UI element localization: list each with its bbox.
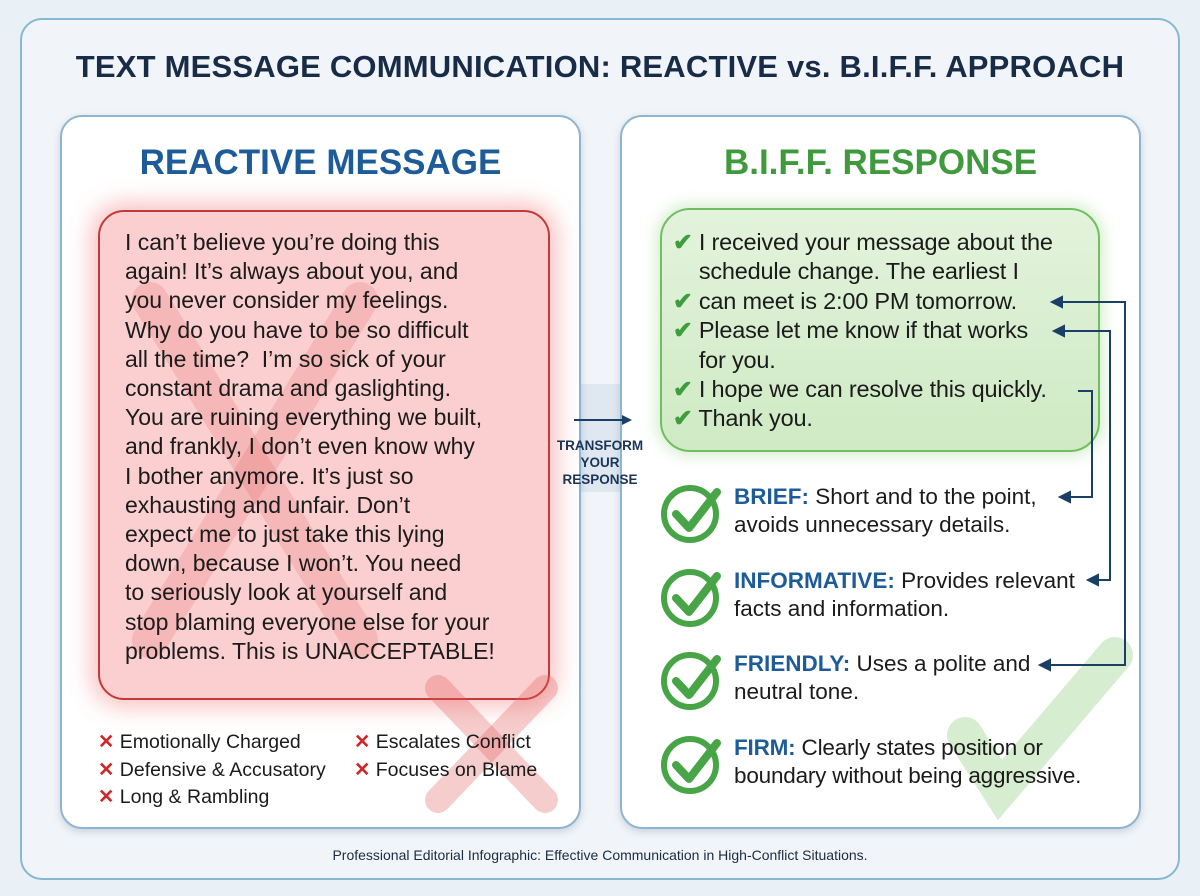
list: reactive traits: ✕ Emotionally Charged [98,731,301,753]
label: transform your response: RESPONSE [562,472,638,487]
biff message text: ✔ I hope we can resolve this quickly. [673,376,1047,402]
reactive message text: problems. This is UNACCEPTABLE! [125,638,495,664]
label: transform your response: TRANSFORM [557,438,643,453]
panel: biff [620,115,1141,829]
list: reactive traits: ✕ Escalates Conflict [354,731,531,753]
footer caption: Professional Editorial Infographic: Effective Communication in High-Conflict Situations. [332,847,868,863]
item: firm [661,735,1081,794]
reactive message text: constant drama and gaslighting. [125,375,451,401]
item: firm: FIRM: Clearly states position or [734,735,1043,760]
reactive message text: expect me to just take this lying [125,521,445,547]
reactive message text: I bother anymore. It’s just so [125,463,414,489]
list: reactive traits: ✕ Focuses on Blame [354,758,537,780]
reactive message text: to seriously look at yourself and [125,579,447,605]
reactive message text: stop blaming everyone else for your [125,609,489,635]
reactive message text: exhausting and unfair. Don’t [125,492,410,518]
item: informative: INFORMATIVE: Provides relevant [734,568,1075,593]
red speech bubble [98,210,550,700]
biff message text: ✔ Thank you. [673,405,813,431]
green bubble [660,208,1100,452]
reactive message text: I can’t believe you’re doing this [125,229,440,255]
reactive message text: and frankly, I don’t even know why [125,433,475,459]
item: friendly [661,651,1030,710]
label: transform your response: YOUR [580,455,620,470]
biff message text: ✔ Please let me know if that works [673,317,1028,343]
list: reactive traits [98,731,537,808]
reactive message text: again! It’s always about you, and [125,258,458,284]
panel: reactive [60,115,581,829]
heading: reactive message: REACTIVE MESSAGE [140,143,501,182]
heading: biff response: B.I.F.F. RESPONSE [724,143,1037,182]
biff message text: ✔ can meet is 2:00 PM tomorrow. [673,288,1017,314]
item: firm: boundary without being aggressive. [734,762,1081,788]
reactive message text: all the time? I’m so sick of your [125,346,446,372]
biff message text: ✔ I received your message about the [673,229,1053,255]
title: TEXT MESSAGE COMMUNICATION: REACTIVE vs. B.I.F.F. APPROACH [76,49,1124,84]
arrow: transform [574,415,632,425]
item: brief: avoids unnecessary details. [734,512,1010,536]
reactive message text: You are ruining everything we built, [125,404,482,430]
list: reactive traits: ✕ Long & Rambling [98,786,269,808]
reactive message text [125,229,495,664]
biff criteria list [661,484,1081,794]
item: informative: facts and information. [734,596,949,620]
item: brief: BRIEF: Short and to the point, [734,484,1037,509]
biff message text [673,229,1053,431]
reactive message text: Why do you have to be so difficult [125,317,468,343]
item: informative [661,568,1075,627]
reactive message text: down, because I won’t. You need [125,550,461,576]
list: reactive traits: ✕ Defensive & Accusatory [98,758,326,780]
reactive message text: you never consider my feelings. [125,287,448,313]
item: friendly: FRIENDLY: Uses a polite and [734,651,1030,676]
item: brief [661,484,1037,543]
item: friendly: neutral tone. [734,678,859,704]
connector strip [575,384,625,492]
label: transform your response [557,438,643,487]
